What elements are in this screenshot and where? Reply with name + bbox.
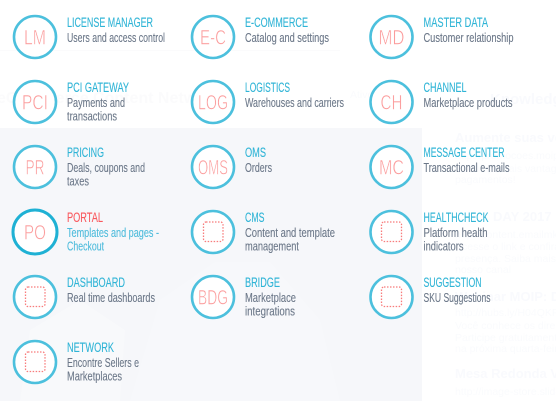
module: Healthcheck: HEALTHCHECK — [424, 210, 488, 225]
module: License Manager: Users and access control — [67, 31, 165, 45]
module: Message Center — [370, 145, 510, 188]
module: OMS — [192, 145, 272, 188]
module: Network: Encontre Sellers e — [67, 356, 139, 370]
module: Message Center: MESSAGE CENTER — [424, 145, 505, 160]
faded background page: http://hubs.ly/H04QKF — [455, 307, 556, 319]
module: Network: NETWORK — [67, 340, 114, 355]
faded background page: DAY 2017 — [493, 209, 552, 224]
module: Logistics: Warehouses and carriers — [245, 96, 344, 110]
module: E-Commerce: E-COMMERCE — [245, 15, 308, 30]
module: Portal (highlighted): PO — [24, 222, 46, 244]
module: Suggestion — [370, 275, 490, 318]
module: Bridge: BRIDGE — [245, 275, 280, 290]
module: Master Data — [370, 15, 514, 58]
faded background page: eCommerce Content Network — [0, 90, 221, 107]
module: PCI Gateway: transactions — [67, 110, 117, 124]
module: Pricing: PRICING — [67, 145, 104, 160]
module: CMS: management — [245, 240, 299, 254]
module: E-Commerce — [192, 15, 329, 58]
module: PCI Gateway: PCI GATEWAY — [67, 80, 129, 95]
module: E-Commerce: E-C — [200, 26, 226, 50]
module: E-Commerce: Catalog and settings — [245, 31, 329, 45]
module: Bridge: Marketplace — [245, 291, 296, 305]
module: OMS: OMS — [198, 156, 228, 180]
module: Logistics: LOGISTICS — [245, 80, 290, 95]
module: Channel: Marketplace products — [424, 96, 512, 110]
module: Pricing — [14, 145, 145, 188]
faded background page: pagamentos! — [455, 174, 516, 186]
module: Portal (highlighted) — [13, 210, 159, 254]
faded background page: Ativo — [350, 89, 374, 101]
module: Bridge: BDG — [198, 286, 228, 310]
module: PCI Gateway: Payments and — [67, 96, 125, 110]
module: Pricing: Deals, coupons and — [67, 161, 145, 175]
module: Channel: CH — [380, 92, 402, 114]
faded background page: nosso canal — [455, 264, 511, 276]
module: Dashboard: Real time dashboards — [67, 291, 155, 305]
module: Network — [14, 340, 139, 384]
module: Healthcheck: Platform health — [424, 226, 488, 240]
module: PCI Gateway — [14, 80, 129, 124]
module: Portal (highlighted): Templates and pages - — [67, 226, 159, 240]
module: Healthcheck: indicators — [424, 240, 464, 254]
module: CMS: Content and template — [245, 226, 335, 240]
module: Dashboard: DASHBOARD — [67, 275, 125, 290]
module: OMS: OMS — [245, 145, 266, 160]
module: Master Data: Customer relationship — [424, 31, 514, 45]
module: Pricing: taxes — [67, 174, 89, 188]
module: Bridge: integrations — [245, 304, 295, 318]
module: CMS — [192, 210, 335, 254]
module: Logistics: LOG — [198, 92, 228, 114]
module: PCI Gateway: PCI — [22, 92, 48, 114]
module: Channel — [370, 80, 512, 123]
module: Network: Marketplaces — [67, 370, 122, 384]
module: OMS: Orders — [245, 161, 272, 175]
module: Master Data: MASTER DATA — [424, 15, 488, 30]
module: Message Center: Transactional e-mails — [424, 161, 510, 175]
module: License Manager: LM — [24, 26, 46, 50]
module: Channel: CHANNEL — [424, 80, 467, 95]
module: Bridge — [192, 275, 296, 318]
module: Healthcheck — [370, 210, 488, 254]
module: Suggestion: SKU Suggestions — [424, 291, 490, 305]
faded background page: Mesa Redonda V — [455, 366, 556, 381]
module: Portal (highlighted): Checkout — [67, 240, 104, 254]
module: CMS: CMS — [245, 210, 264, 225]
module: Message Center: MC — [379, 156, 404, 180]
module: Master Data: MD — [378, 26, 404, 50]
module: Suggestion: SUGGESTION — [424, 275, 482, 290]
module: Dashboard — [14, 275, 155, 318]
module: Logistics — [192, 80, 344, 123]
module: License Manager: LICENSE MANAGER — [67, 15, 153, 30]
module: Pricing: PR — [26, 156, 44, 180]
module: License Manager — [14, 15, 165, 58]
module: Portal (highlighted): PORTAL — [67, 210, 103, 225]
